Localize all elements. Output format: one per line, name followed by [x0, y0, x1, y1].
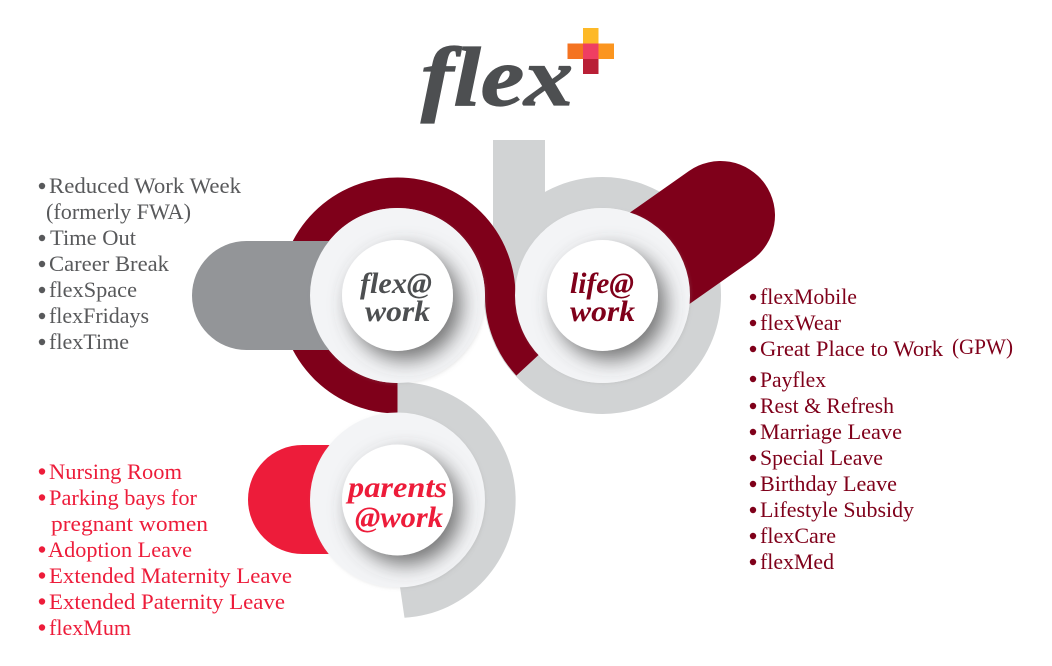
- text block: flex at work list: flexTime: [49, 329, 129, 354]
- logo wordmark: flex: [421, 31, 573, 124]
- text block: parents at work list: Extended Maternity Leave: [49, 563, 292, 588]
- pill: life at work dark red: [602, 216, 720, 298]
- text block: flex at work list: Reduced Work Week: [49, 173, 242, 198]
- pill: flex at work grey: [192, 241, 422, 350]
- text block: life at work list: Special Leave: [760, 445, 883, 470]
- text block: life at work list: [750, 284, 1013, 574]
- text block: flex at work list: Time Out: [50, 225, 137, 250]
- heading: flex at work: work: [365, 295, 430, 328]
- text block: life at work list: Rest & Refresh: [760, 393, 894, 418]
- text block: flex at work list: Career Break: [49, 251, 170, 276]
- text block: parents at work list: Extended Paternity Leave: [49, 589, 285, 614]
- text block: parents at work list: Adoption Leave: [48, 537, 192, 562]
- text block: life at work list: Marriage Leave: [760, 419, 902, 444]
- text block: life at work list: flexMobile: [760, 284, 857, 309]
- heading: life at work: life@: [570, 267, 634, 300]
- logo: flex plus: [421, 28, 614, 124]
- icon: colour plus sign: [568, 28, 614, 74]
- panel: flex at work circle: [310, 208, 485, 383]
- text block: flex at work list: (formerly FWA): [46, 199, 191, 224]
- text block: flex at work list: [39, 173, 242, 354]
- pill: parents at work red: [248, 445, 418, 554]
- panel: parents at work circle: [310, 412, 485, 588]
- connector: dark red S-curve: [295, 193, 528, 398]
- text block: life at work list: flexMed: [760, 549, 834, 574]
- text block: flex at work list: flexFridays: [49, 303, 149, 328]
- heading: parents at work: parents: [345, 471, 447, 504]
- heading: life at work: [570, 267, 635, 328]
- text block: flex at work list: flexSpace: [49, 277, 137, 302]
- connector: grey stem and life ring: [493, 140, 706, 398]
- text block: parents at work list: Nursing Room: [49, 459, 182, 484]
- text block: life at work list: flexCare: [760, 523, 836, 548]
- text block: life at work list: Payflex: [760, 367, 826, 392]
- text block: life at work list: flexWear: [760, 310, 841, 335]
- heading: flex at work: flex@: [360, 267, 432, 300]
- text block: life at work list: Birthday Leave: [760, 471, 897, 496]
- text block: parents at work list: flexMum: [49, 615, 131, 640]
- text block: parents at work list: Parking bays for: [49, 485, 197, 510]
- text block: life at work list: Lifestyle Subsidy: [760, 497, 915, 522]
- text block: life at work list: Great Place to Work: [760, 336, 944, 361]
- heading: life at work: work: [570, 295, 635, 328]
- panel: life at work circle: [515, 208, 690, 383]
- text block: life at work list: (GPW): [952, 334, 1013, 359]
- heading: flex at work: [360, 267, 432, 328]
- text block: parents at work list: [39, 459, 292, 640]
- heading: parents at work: [345, 471, 447, 534]
- text block: parents at work list: pregnant women: [51, 511, 208, 536]
- connector: grey arc around parents: [398, 382, 516, 618]
- heading: parents at work: @work: [355, 501, 443, 534]
